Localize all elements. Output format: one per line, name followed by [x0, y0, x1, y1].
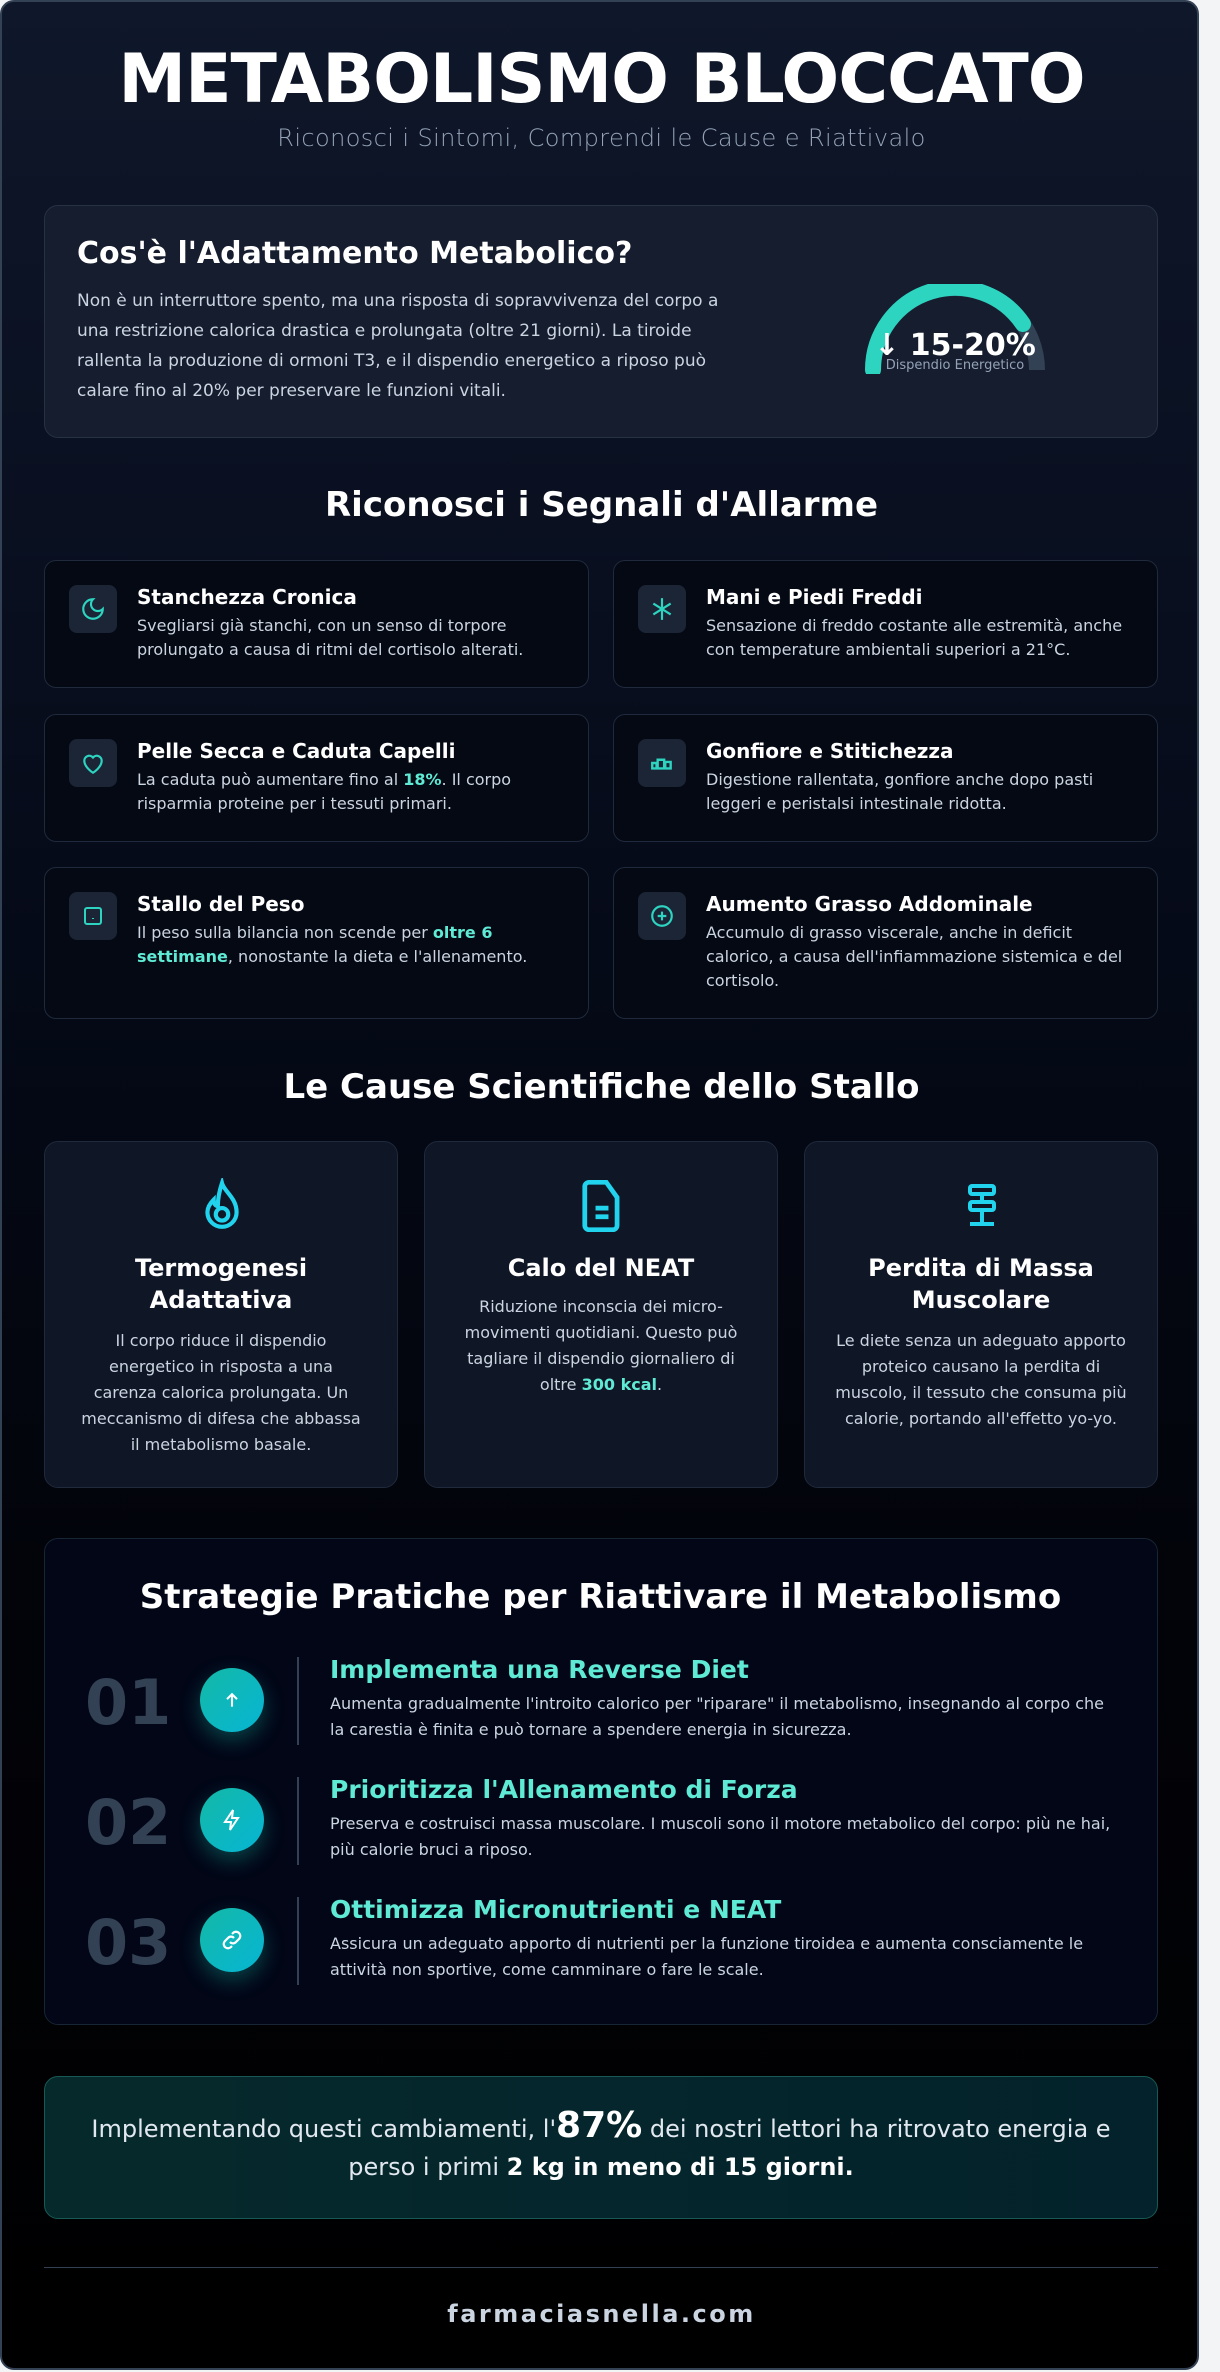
- title: METABOLISMO BLOCCATO: [118, 40, 1085, 119]
- symptom: pelle: La caduta può aumentare fino al 18%. Il corpo risparmia proteine per i tessuti primari.: [137, 770, 511, 813]
- strategy 02: Prioritizza l'Allenamento di Forza: [330, 1775, 798, 1804]
- cause: NEAT: Riduzione inconscia dei micro-movimenti quotidiani. Questo può tagliare il dispendio giornaliero di oltre 300 kcal.: [465, 1297, 737, 1394]
- strategy 03: Assicura un adeguato apporto di nutrienti per la funzione tiroidea e aumenta consciamente le attività non sportive, come camminare o fare le scale.: [330, 1934, 1083, 1979]
- symptom: freddo: [613, 560, 1158, 688]
- strategy 01: Aumenta gradualmente l'introito calorico per "riparare" il metabolismo, insegnando al corpo che la carestia è finita e può tornare a spendere energia in sicurezza.: [330, 1694, 1104, 1739]
- symptom: pelle: Pelle Secca e Caduta Capelli: [137, 739, 456, 763]
- symptom: stanchezza: Svegliarsi già stanchi, con un senso di torpore prolungato a causa di ritmi del cortisolo alterati.: [137, 616, 523, 659]
- symptom: stanchezza: [44, 560, 589, 688]
- gauge chart: ↓ 15-20%: [874, 328, 1036, 363]
- strategy 02: [85, 1775, 1110, 1869]
- cause: termogenesi: [44, 1141, 398, 1488]
- icon: muscle stand: [968, 1184, 996, 1226]
- footer: farmaciasnella.com: [447, 2300, 756, 2328]
- symptom: pelle: [44, 714, 589, 842]
- icon: scale: [69, 892, 117, 940]
- strategy 02: Preserva e costruisci massa muscolare. I muscoli sono il motore metabolico del corpo: più ne hai, più calorie bruci a riposo.: [330, 1814, 1110, 1859]
- symptom: peso: Stallo del Peso: [137, 892, 304, 916]
- cause: termogenesi: Termogenesi: [135, 1254, 307, 1282]
- symptom: gonfiore: Digestione rallentata, gonfiore anche dopo pasti leggeri e peristalsi intestinale ridotta.: [706, 770, 1093, 813]
- icon: plus circle: [638, 892, 686, 940]
- symptom: grasso addominale: [613, 867, 1158, 1019]
- heading: Cos'è l'Adattamento Metabolico?: [77, 236, 632, 271]
- symptom: peso: Il peso sulla bilancia non scende per oltre 6 settimane, nonostante la dieta e l'allenamento.: [137, 923, 527, 966]
- cause: massa muscolare: Le diete senza un adeguato apporto proteico causano la perdita di muscolo, il tessuto che consuma più calorie, portando all'effetto yo-yo.: [835, 1331, 1127, 1428]
- icon: moon: [69, 585, 117, 633]
- cause: termogenesi: Il corpo riduce il dispendio energetico in risposta a una carenza calorica prolungata. Un meccanismo di difesa che abbassa il metabolismo basale.: [81, 1331, 361, 1454]
- symptom: gonfiore: Gonfiore e Stitichezza: [706, 739, 954, 763]
- cause: NEAT: Calo del NEAT: [508, 1254, 694, 1282]
- icon: link: [200, 1908, 264, 1972]
- cause: NEAT: [424, 1141, 778, 1488]
- symptom: grasso addominale: Accumulo di grasso viscerale, anche in deficit calorico, a causa dell'infiammazione sistemica e del cortisolo.: [706, 923, 1122, 990]
- strategy 01: [85, 1655, 1104, 1749]
- symptom: grasso addominale: Aumento Grasso Addominale: [706, 892, 1033, 916]
- icon: gut: [638, 739, 686, 787]
- cause: massa muscolare: Muscolare: [912, 1286, 1050, 1314]
- strategy 01: Implementa una Reverse Diet: [330, 1655, 749, 1684]
- cause: massa muscolare: Perdita di Massa: [868, 1254, 1094, 1282]
- strategy 01: 01: [85, 1666, 171, 1739]
- icon: bolt: [200, 1788, 264, 1852]
- icon: arrow up: [200, 1668, 264, 1732]
- strategy 03: [85, 1895, 1083, 1989]
- strategy 03: 03: [85, 1906, 171, 1979]
- gauge chart: Dispendio Energetico: [886, 358, 1024, 373]
- symptom: freddo: Sensazione di freddo costante alle estremità, anche con temperature ambientali superiori a 21°C.: [706, 616, 1122, 659]
- strategy 03: Ottimizza Micronutrienti e NEAT: [330, 1895, 781, 1924]
- cause: termogenesi: Adattativa: [150, 1286, 292, 1314]
- panel: strategie: [44, 1538, 1158, 2025]
- callout: Implementando questi cambiamenti, l'87% dei nostri lettori ha ritrovato energia e perso i primi 2 kg in meno di 15 giorni.: [91, 2105, 1111, 2181]
- symptom: freddo: Mani e Piedi Freddi: [706, 585, 922, 609]
- icon: flame: [205, 1178, 239, 1229]
- callout: [44, 2076, 1158, 2219]
- heading: Strategie Pratiche per Riattivare il Metabolismo: [140, 1577, 1061, 1617]
- heading: cause: Le Cause Scientifiche dello Stallo: [284, 1067, 919, 1107]
- subtitle: Riconosci i Sintomi, Comprendi le Cause e Riattivalo: [277, 124, 926, 152]
- heading: segnali d'allarme: Riconosci i Segnali d'Allarme: [325, 485, 878, 525]
- icon: document: [582, 1180, 620, 1232]
- panel: adattamento metabolico: [44, 205, 1158, 438]
- symptom: gonfiore: [613, 714, 1158, 842]
- strategy 02: 02: [85, 1786, 171, 1859]
- icon: snowflake: [638, 585, 686, 633]
- icon: heart: [69, 739, 117, 787]
- body text: Non è un interruttore spento, ma una risposta di sopravvivenza del corpo a una restrizione calorica drastica e prolungata (oltre 21 giorni). La tiroide rallenta la produzione di ormoni T3, e il dispendio energetico a riposo può calare fino al 20% per preservare le funzioni vitali.: [77, 291, 718, 401]
- symptom: peso: [44, 867, 589, 1019]
- cause: massa muscolare: [804, 1141, 1158, 1488]
- gauge chart: [865, 284, 1045, 374]
- symptom: stanchezza: Stanchezza Cronica: [137, 585, 357, 609]
